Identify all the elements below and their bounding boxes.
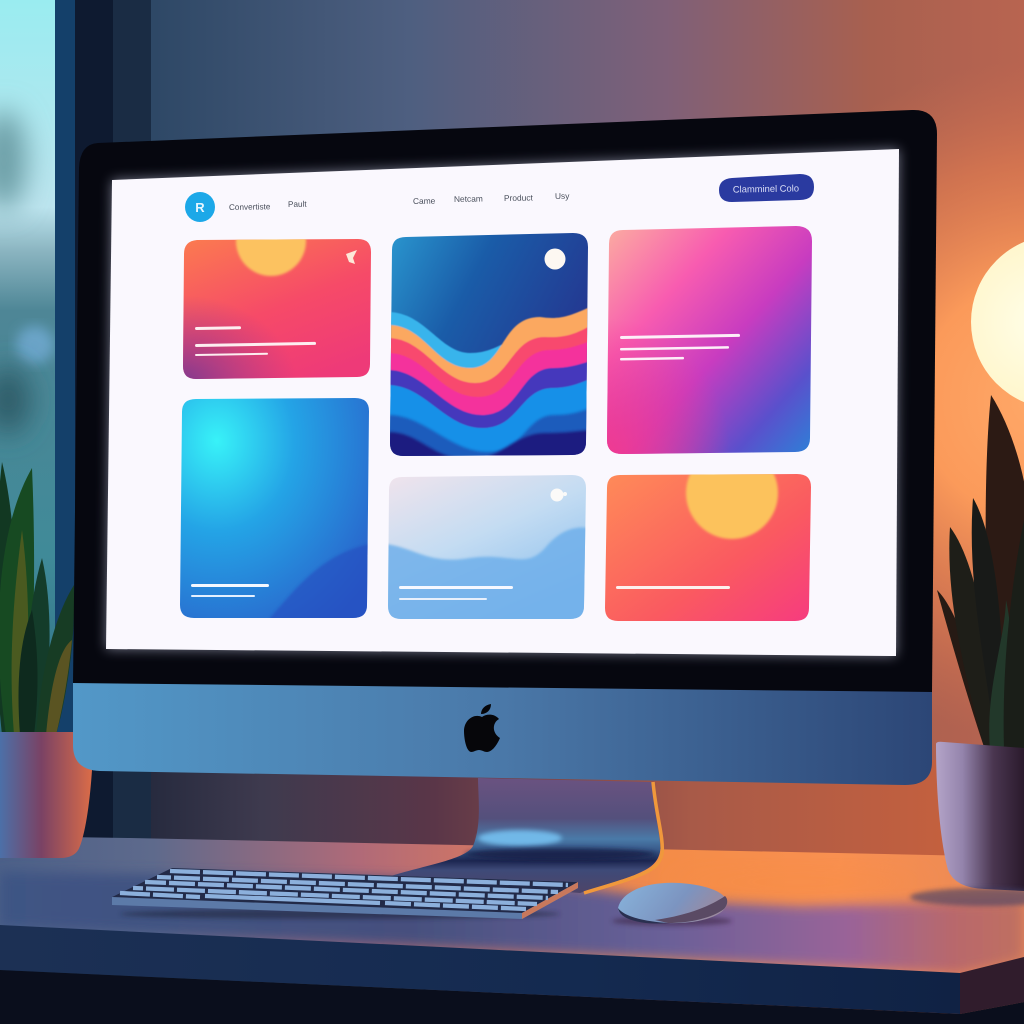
card: waves [388,230,590,470]
nav center: Product [504,192,534,203]
right plant [936,395,1024,891]
screen [106,149,899,656]
keyboard right edge [522,882,578,919]
keyboard [112,868,578,919]
plant pot [936,742,1024,891]
orange glow on desk edge [670,874,930,890]
desk front edge [0,925,1024,1024]
card: orange sun [605,474,811,621]
screen glow [106,149,899,656]
call to action button [719,174,814,202]
desk surface [0,836,1024,974]
plant leaves [937,395,1024,750]
keyboard body [112,868,578,919]
nav center: Netcam [454,193,483,204]
card: pink gradient [605,225,815,457]
text line [616,586,730,589]
nav left: Pault [288,200,307,209]
text lines [620,334,740,360]
card: pale landscape [385,473,589,623]
lamp glow [640,0,1024,880]
card: cyan gradient [178,396,372,621]
keys [120,871,568,909]
nav center: Came [413,196,436,206]
plant pot [0,732,92,858]
monitor stand [385,778,662,893]
call to action button: Clamminel Colo [733,182,799,195]
nav left: Convertiste [229,202,271,212]
logo badge: R [195,200,205,215]
nav left [229,200,307,212]
mouse [612,883,732,926]
window frame [55,0,151,840]
icon: apple logo [464,704,500,752]
monitor [73,110,937,785]
left plant [0,462,92,858]
lamp globe [971,235,1024,409]
text lines [191,584,269,587]
window with blurred foliage [0,0,55,740]
nav center: Usy [555,191,570,201]
logo badge [185,192,215,222]
text lines [399,586,513,589]
card: sunset [183,239,371,379]
right pot shadow [910,888,1024,906]
nav center [413,191,570,206]
text lines [195,326,316,356]
plant leaves [0,462,74,735]
chin [73,680,932,785]
bezel [73,110,937,692]
